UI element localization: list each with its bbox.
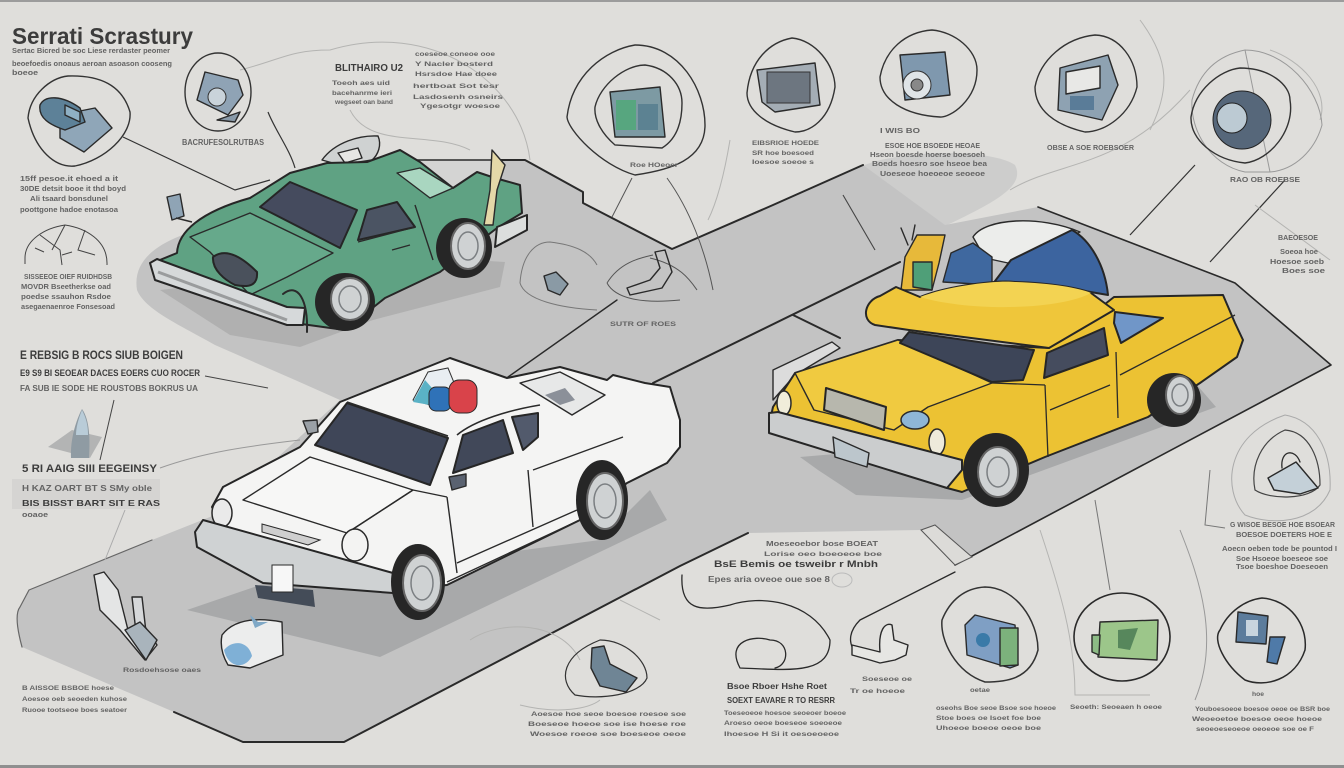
yellow car: windshield <box>900 332 1034 382</box>
text: caption D: SR hoe boesoed <box>752 150 814 157</box>
luggage: large blue case <box>992 230 1108 295</box>
text block: left heading two: ooaoe <box>22 512 48 519</box>
icon: dome frame <box>25 225 107 265</box>
text block: upper centre: Hsrsdoe Hae doee <box>415 71 498 78</box>
text block: bottom centre left: Aoesoe hoe seoe boesoe roesoe soe <box>531 711 687 718</box>
text: icon K caption: Weoeoetoe boesoe oeoe hoeoe <box>1192 716 1323 723</box>
green car: body <box>155 150 522 330</box>
text block: subtitle: beoefoedis onoaus aeroan asoason cooseng <box>12 61 172 68</box>
light strip at road end <box>921 525 972 565</box>
text block: centre bottom: Toeseoeoe hoesoe seoeoer boeoe <box>724 710 846 717</box>
text block: bottom left: Aoesoe oeb seoeden kuhose <box>22 696 127 703</box>
icon: road part small clamp <box>520 242 597 310</box>
text block: subtitle <box>12 48 172 77</box>
text block: road label: Rosdoehsose oaes <box>123 667 201 674</box>
car shadows <box>160 258 505 347</box>
text block: right lower <box>1222 522 1337 571</box>
green car: hood <box>190 213 333 295</box>
text block: left one: poottgone hadoe enotasoa <box>20 207 118 214</box>
text block: right side: BAEOESOE <box>1278 235 1318 242</box>
text block: right lower: Aoecn oeben tode be pountod I <box>1222 546 1337 553</box>
green car: bed tray <box>415 160 493 195</box>
text: caption E: Hseon boesde hoerse boesoeh <box>870 152 985 159</box>
text block: road notes: Epes aria oveoe oue soe 8 <box>708 574 830 584</box>
white car: side windows <box>453 420 513 473</box>
white car: lights and grille <box>212 499 232 527</box>
text block: right lower: G WISOE BESOE HOE BSOEAR <box>1230 522 1335 529</box>
text block: right side <box>1270 235 1325 275</box>
text: caption F: OBSE A SOE ROEBSOER <box>1047 143 1135 152</box>
text block: left one: 15ff pesoe.it ehoed a it <box>20 176 119 183</box>
text: caption G: RAO OB ROEBSE <box>1230 175 1300 184</box>
text block: bottom left: B AISSOE BSBOE hoese <box>22 685 114 692</box>
icon: road part bracket <box>607 250 697 301</box>
icon: seat machine <box>28 76 130 166</box>
text block: right lower: Tsoe boeshoe Doeseoen <box>1236 564 1328 571</box>
text: caption E: ESOE HOE BSOEDE HEOAE <box>885 143 980 150</box>
text block: left one <box>20 176 126 214</box>
green car: roof accessory <box>322 136 380 165</box>
title: Serrati Scrastury <box>12 23 193 49</box>
green car: rear panel <box>495 215 527 247</box>
text block: blithairo: bacehanrme ieri <box>332 90 392 97</box>
icon E: camera <box>880 30 977 117</box>
luggage: small blue case <box>943 243 992 285</box>
text block: blithairo <box>332 63 403 106</box>
text: icon J caption: Seoeth: Seoeaen h oeoe <box>1070 704 1162 711</box>
text block: right side: Boes soe <box>1282 268 1325 275</box>
text block: bottom left: Ruooe tootseoe boes seatoer <box>22 707 128 714</box>
text block: centre bottom: Bsoe Rboer Hshe Roet <box>727 682 827 691</box>
yellow car: roof highlight <box>920 282 1091 307</box>
green car: bumper <box>150 259 305 325</box>
icon: box on road <box>221 615 283 668</box>
text block: right lower: Soe Hsoeoe boeseoe soe <box>1236 556 1328 563</box>
yellow car: roof <box>866 282 1114 348</box>
text block: left two: asegaenaenroe Fonsesoad <box>21 304 115 311</box>
text block: left two: SISSEEOE OIEF RUIDHDSB <box>24 274 112 281</box>
white car: bumper <box>195 520 393 593</box>
text block: right lower: BOESOE DOETERS HOE E <box>1236 532 1332 539</box>
text block: centre bottom: Ihoesoe H Si it oesoeoeoe <box>724 731 840 738</box>
white car: windshield <box>315 403 448 485</box>
icon: folded tool on road <box>94 572 157 660</box>
green car <box>150 136 527 332</box>
text: hand caption: Tr oe hoeoe <box>850 688 906 695</box>
text block: upper centre <box>413 51 504 110</box>
yellow car: rear window <box>1114 312 1163 343</box>
text: icon I caption: Uhoeoe boeoe oeoe boe <box>936 725 1042 732</box>
text: caption E: Boeds hoesro soe hseoe bea <box>872 161 987 168</box>
text block: centre bottom <box>724 682 846 738</box>
text block: large heading left: E REBSIG B ROCS SIUB BOIGEN <box>20 348 183 362</box>
yellow car: wheels <box>963 433 1029 507</box>
green car: side window <box>358 202 415 240</box>
text block: road notes: BsE Bemis oe tsweibr r Mnbh <box>714 559 878 569</box>
text block: left one: Ali tsaard bonsdunel <box>30 196 108 203</box>
text block: right side: Soeoa hoe <box>1280 249 1318 256</box>
text block: upper centre: Y Nacler bosterd <box>415 61 493 68</box>
icon K: blue tablet <box>1218 598 1305 683</box>
green car: grille <box>213 253 257 286</box>
icon L: seat part <box>565 640 647 697</box>
text block: bottom centre left: Woesoe roeoe soe boeseoe oeoe <box>530 731 687 738</box>
icon: hand <box>852 624 908 663</box>
text block: upper centre: coeseoe coneoe ooe <box>415 51 495 58</box>
luggage: green box <box>913 262 932 290</box>
text block: blithairo: wegseet oan band <box>334 99 393 106</box>
yellow car: chrome strip <box>773 342 840 400</box>
yellow car: side window <box>1044 328 1108 378</box>
text block: road notes <box>708 541 883 587</box>
icon: round gauge <box>185 53 251 131</box>
text: caption E: Uoeseoe hoeoeoe seoeoe <box>880 171 985 178</box>
white car: body <box>212 358 680 590</box>
green car: windshield <box>260 182 357 248</box>
text: icon I caption: oetae <box>970 687 990 694</box>
icon I: blue green box <box>942 587 1038 682</box>
green car: mint panel <box>397 168 453 198</box>
icon J: green card <box>1074 593 1170 681</box>
text: hand caption: Soeseoe oe <box>862 676 913 683</box>
grey smear behind top text <box>862 153 1017 226</box>
luggage behind yellow car <box>901 221 1108 295</box>
text block: large heading left <box>20 348 200 393</box>
text block: left two: MOVDR Bseetherkse oad <box>21 284 111 291</box>
green car: wheels <box>315 273 375 331</box>
white car: mirrors <box>303 420 318 434</box>
text: icon I caption: Stoe boes oe Isoet foe boe <box>936 715 1041 722</box>
text block: bottom centre left <box>528 711 687 738</box>
text: icon I caption <box>936 687 1056 732</box>
text block: large heading left: FA SUB IE SODE HE ROUSTOBS BOKRUS UA <box>20 384 198 393</box>
text block: blithairo: BLITHAIRO U2 <box>335 63 403 74</box>
text block: road notes: Lorise oeo boeoeoe boe <box>764 551 883 558</box>
icon C: green box <box>567 45 705 175</box>
text block: bottom left <box>22 685 128 714</box>
text block: left heading two: BIS BISST BART SIT E RAS <box>22 498 160 508</box>
text block: large heading left: E9 S9 BI SEOEAR DACES EOERS CUO ROCER <box>20 368 200 378</box>
luggage: white bag <box>973 221 1080 263</box>
text: caption gauge: BACRUFESOLRUTBAS <box>182 138 265 147</box>
text: icon K caption: hoe <box>1252 691 1264 698</box>
text: caption D <box>752 140 820 166</box>
white car: wheels <box>391 544 445 620</box>
text block: subtitle: boeoe <box>12 70 38 77</box>
road surface <box>17 160 1331 742</box>
yellow car: hood <box>795 340 992 430</box>
white car: under bumper <box>255 585 315 607</box>
text: icon K caption <box>1192 691 1330 733</box>
green car: door <box>358 205 433 260</box>
text block: left heading two <box>12 463 160 519</box>
text block: left two <box>21 274 115 311</box>
icon H: bag <box>1232 415 1330 521</box>
text: icon K caption: Youboesoeoe boesoe oeoe oe BSR boe <box>1195 706 1330 713</box>
icon F: device <box>1035 35 1137 132</box>
text: caption E: I WIS BO <box>880 128 921 135</box>
text block: centre bottom: Aroeso oeoe boeseoe soeoeoe <box>724 720 842 727</box>
yellow car <box>769 282 1243 507</box>
white car: bed <box>520 372 605 415</box>
text: icon K caption: seoeoeseoeoe oeoeoe soe oe F <box>1196 726 1314 733</box>
text block: bottom centre left: Boeseoe hoeoe soe ise hoese roe <box>528 721 687 728</box>
text block: centre bottom: SOEXT EAVARE R TO RESRR <box>727 696 835 705</box>
yellow car: door lines <box>992 315 1235 457</box>
white car: roof line <box>347 402 540 436</box>
icon D: screen <box>747 38 835 132</box>
text block: upper centre: Ygesotgr woesoe <box>420 103 501 110</box>
text block: road notes: Moeseoebor bose BOEAT <box>766 541 879 548</box>
yellow car: body <box>769 295 1243 492</box>
text block: right side: Hoesoe soeb <box>1270 259 1324 266</box>
yellow car: bumper <box>769 412 962 488</box>
luggage: yellow box <box>901 235 945 290</box>
text block: subtitle: Sertac Bicred be soc Liese rerdaster peomer <box>12 48 170 55</box>
text: hand caption <box>850 676 913 695</box>
text block: left two: poedse ssauhon Rsdoe <box>21 294 111 301</box>
text: caption D: EIBSRIOE HOEDE <box>752 140 820 147</box>
text: icon I caption: oseohs Boe seoe Bsoe soe hoeoe <box>936 705 1056 712</box>
road edges <box>17 160 1331 742</box>
white car: hood <box>243 457 413 533</box>
text: caption E <box>870 128 987 178</box>
green car: mirror <box>167 194 184 220</box>
text: road label: SUTR OF ROES <box>610 321 677 328</box>
text block: left heading two: H KAZ OART BT S SMy oble <box>22 483 152 493</box>
text block: left one: 30DE detsit booe it thd boyd <box>20 186 126 193</box>
text block: upper centre: hertboat Sot tesr <box>413 83 500 90</box>
icon: cone <box>48 409 102 458</box>
text block: blithairo: Toeoh aes uid <box>332 80 390 87</box>
text: caption D: Ioesoe soeoe s <box>752 159 815 166</box>
text block: upper centre: Lasdosenh osneirs <box>413 94 504 101</box>
white car: siren <box>413 368 455 405</box>
white car: door lines <box>347 437 623 582</box>
icon G: wheel hub <box>1191 50 1322 172</box>
yellow car: grille and lights <box>824 388 886 430</box>
text block: left heading two: 5 RI AAIG SIII EEGEINSY <box>22 463 158 475</box>
text: caption C: Roe HOeoer <box>630 162 679 169</box>
white car <box>195 358 680 620</box>
